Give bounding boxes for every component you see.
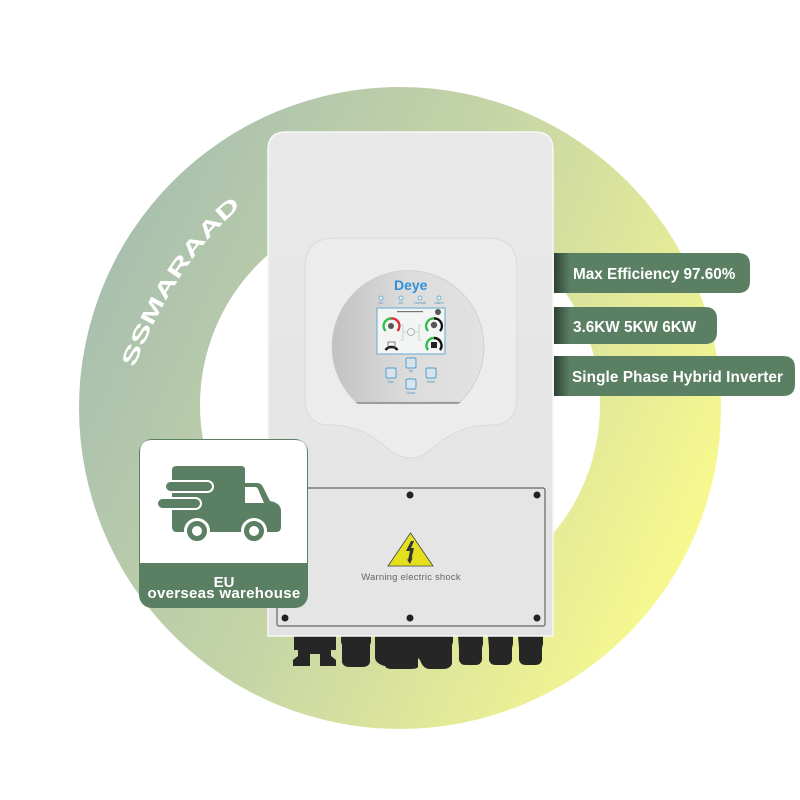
cover screws	[282, 492, 540, 622]
card caption: EU	[214, 574, 234, 591]
icon: delivery truck	[157, 466, 281, 542]
spec tag: product type	[554, 356, 795, 396]
LED labels	[379, 301, 444, 305]
brand: Deye: Deye	[394, 277, 428, 293]
brand logo: SMARAAD: SSMARAAD	[123, 200, 237, 366]
keypad labels: Up	[409, 369, 413, 373]
gland 2	[375, 636, 418, 669]
card caption	[148, 574, 300, 602]
LED labels: AC	[399, 301, 404, 305]
connector: terminal block	[293, 636, 336, 666]
warehouse card	[139, 439, 308, 608]
keypad labels	[388, 369, 436, 395]
cable glands under the inverter	[293, 636, 543, 669]
background ring	[79, 87, 721, 729]
gland 4	[458, 636, 483, 665]
display recess	[305, 238, 517, 458]
spec tag: product type: Single Phase Hybrid Inverter	[572, 369, 783, 386]
keypad labels: Enter	[427, 380, 436, 384]
LED labels: Alarm	[434, 301, 444, 305]
spec tag: efficiency	[554, 253, 750, 293]
control panel disc	[332, 271, 484, 404]
spec tag: power ratings: 3.6KW 5KW 6KW	[573, 319, 697, 336]
card caption: overseas warehouse	[148, 585, 300, 602]
gland 1	[341, 636, 371, 667]
inverter body	[268, 132, 553, 636]
keypad labels: Down	[407, 391, 416, 395]
status LEDs	[379, 296, 441, 300]
LED labels: Normal	[414, 301, 426, 305]
keypad labels: Esc	[388, 380, 394, 384]
LCD screen	[377, 308, 445, 354]
gland 6	[518, 636, 543, 665]
spec tag: efficiency: Max Efficiency 97.60%	[573, 266, 736, 283]
spec tag: power ratings	[554, 307, 717, 344]
warning triangle icon	[388, 533, 433, 566]
gland 5	[488, 636, 513, 665]
warning text: Warning electric shock	[361, 572, 461, 583]
keypad buttons	[386, 358, 436, 389]
LED labels: AC	[379, 301, 384, 305]
terminal cover	[277, 488, 545, 626]
gland 3	[416, 636, 453, 669]
